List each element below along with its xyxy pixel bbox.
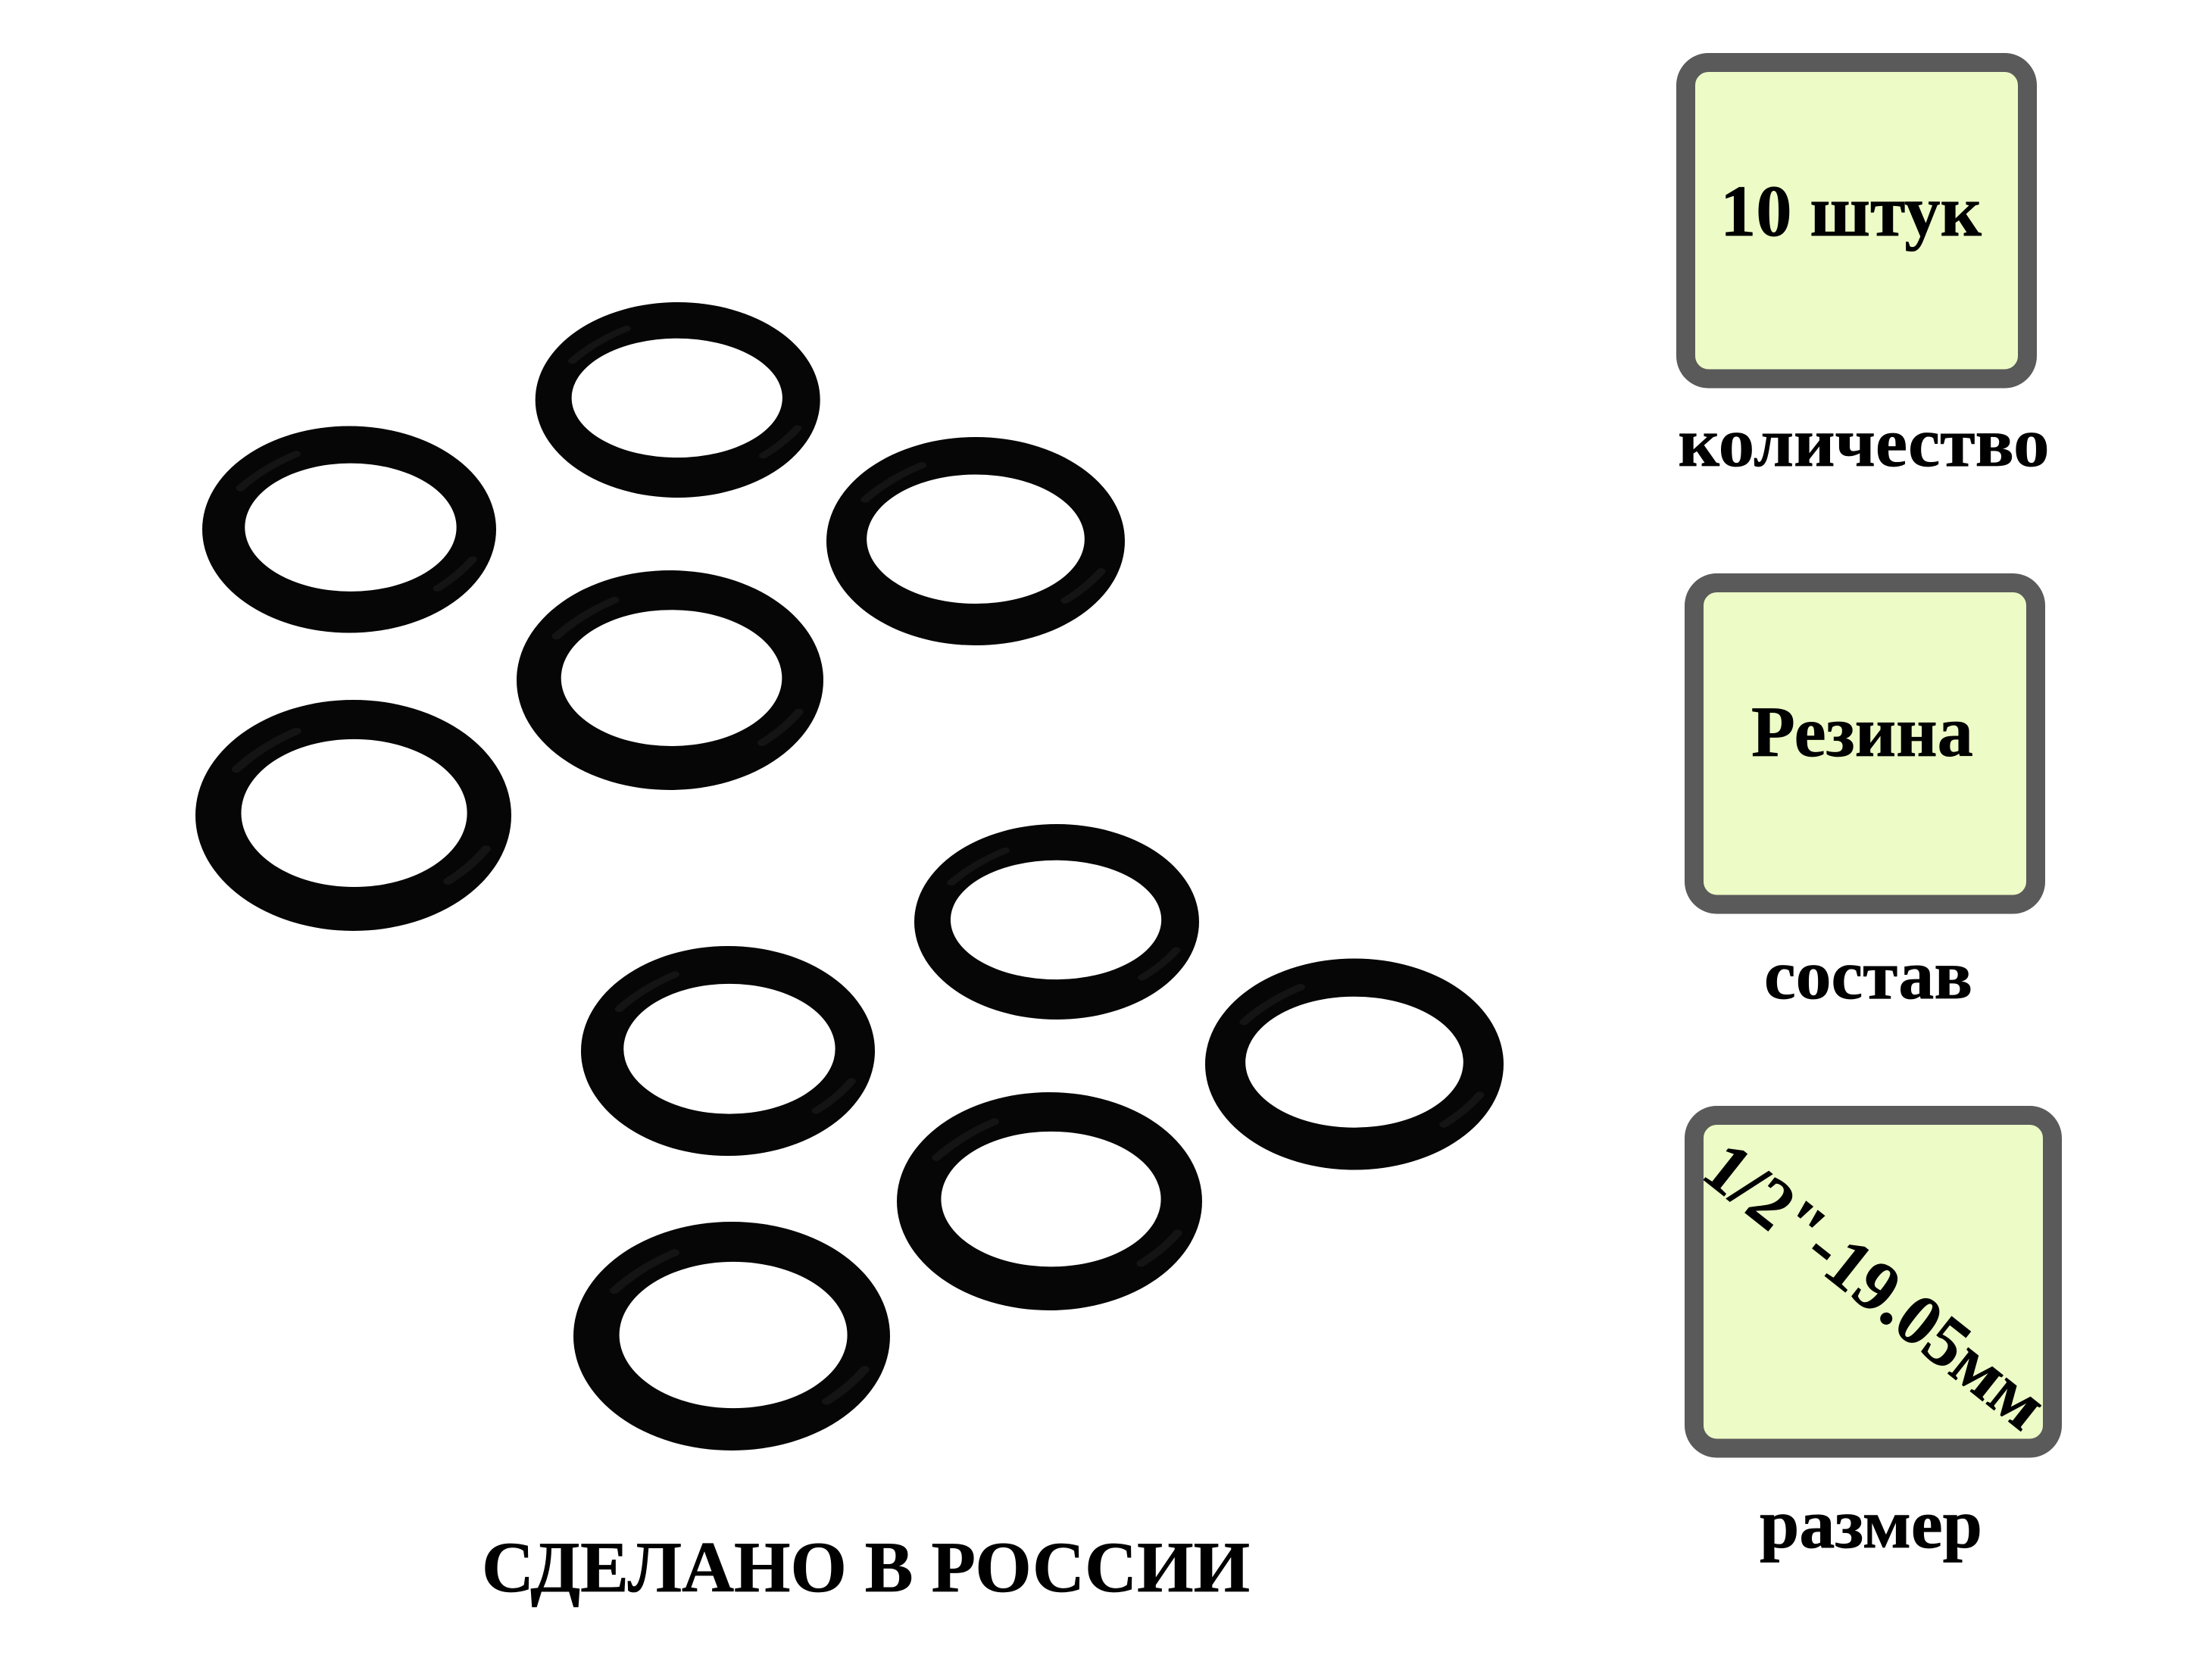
quantity value: 10 штук — [1720, 170, 1982, 251]
ring 6: top of lower group — [914, 824, 1199, 1020]
ring 2: upper left — [202, 426, 496, 633]
ring 10: bottom of lower group — [573, 1222, 890, 1450]
ring 1: top centre — [536, 302, 820, 498]
caption: made in Russia: СДЕЛАНО В РОССИИ — [482, 1527, 1250, 1607]
ring 4: centre — [517, 570, 823, 790]
material box — [1694, 583, 2036, 904]
quantity label: количество — [1679, 404, 2050, 481]
ring 8: right of lower group — [1205, 959, 1504, 1169]
ring 7: left of lower group — [581, 946, 875, 1156]
size label: размер — [1760, 1485, 1982, 1563]
material value: Резина — [1751, 692, 1973, 772]
panel: quantity — [1679, 62, 2050, 481]
ring 3: upper right — [826, 437, 1125, 645]
size value, diagonal: 1/2"-19.05мм — [1689, 1126, 2063, 1445]
panel: size — [1689, 1115, 2063, 1563]
quantity box — [1686, 62, 2027, 379]
size box — [1694, 1115, 2053, 1448]
ring 9: centre of lower group — [897, 1092, 1202, 1310]
panel: material — [1694, 583, 2036, 1013]
material label: состав — [1764, 936, 1972, 1013]
ring 5: lower left of upper group — [195, 700, 511, 931]
